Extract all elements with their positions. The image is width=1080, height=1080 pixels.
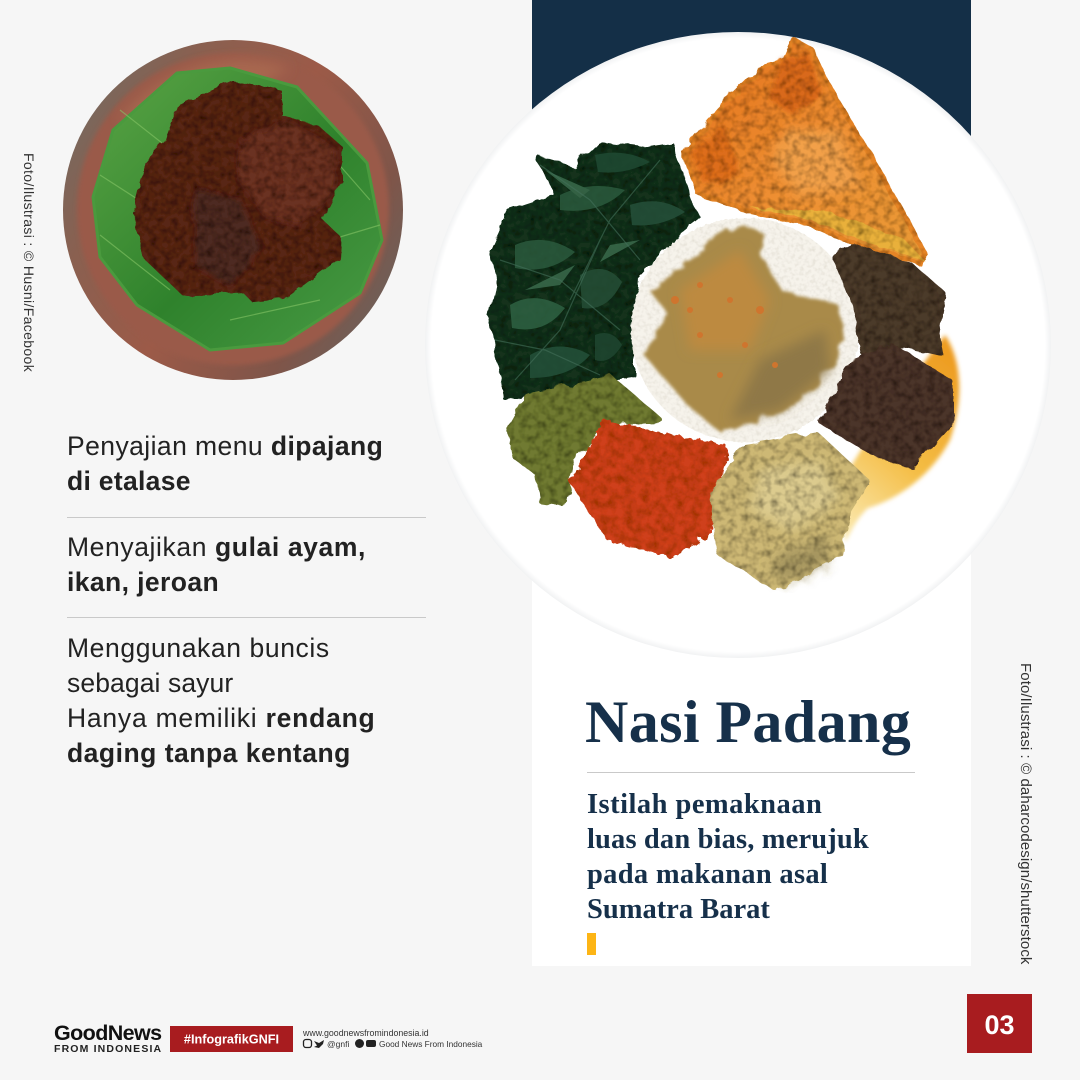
icon: dark rendang bottom bbox=[822, 347, 950, 466]
text block: rendang point three: Hanya memiliki bbox=[67, 703, 266, 733]
page number: 03 bbox=[984, 1010, 1015, 1040]
text block: rendang point one: dipajang bbox=[271, 431, 383, 461]
photo: rendang bowl bbox=[63, 40, 403, 380]
icon: instagram bbox=[304, 1040, 312, 1048]
text block: nasi padang description: pada makanan asal bbox=[587, 859, 828, 890]
text block: nasi padang description: Sumatra Barat bbox=[587, 894, 770, 925]
icon: yellow curry sauce bbox=[842, 335, 959, 542]
social links: www.goodnewsfromindonesia.id bbox=[302, 1028, 429, 1038]
text block: rendang point three: sebagai sayur bbox=[67, 668, 233, 698]
icon: facebook bbox=[355, 1039, 364, 1048]
banana leaf bbox=[93, 68, 382, 350]
hashtag badge bbox=[170, 1026, 293, 1052]
icon: rice mound bbox=[631, 218, 859, 442]
icon: dark rendang top bbox=[836, 247, 942, 353]
title: Nasi Padang bbox=[585, 689, 911, 755]
icon: twitter bbox=[314, 1040, 324, 1048]
panel: white title card bbox=[532, 240, 971, 966]
plate bbox=[425, 32, 1051, 658]
accent bar bbox=[587, 933, 596, 955]
social links: @gnfi bbox=[327, 1039, 349, 1049]
text block: rendang point two: Menyajikan bbox=[67, 532, 215, 562]
social links bbox=[302, 1028, 483, 1049]
rendang meat bbox=[135, 83, 340, 300]
text block: rendang point one: Penyajian menu bbox=[67, 431, 271, 461]
text block: rendang point two: gulai ayam, bbox=[215, 532, 366, 562]
panel: navy header block bbox=[532, 0, 971, 240]
photo: nasi padang plate bbox=[425, 32, 1051, 658]
icon: gulai offal bbox=[713, 436, 866, 586]
icon: omelette wedge bbox=[684, 40, 925, 262]
logo: GoodNews: FROM INDONESIA bbox=[54, 1043, 162, 1055]
icon: red chili sambal bbox=[573, 424, 725, 554]
icon: youtube bbox=[366, 1040, 376, 1047]
page number bbox=[967, 994, 1032, 1053]
text block: rendang point two: ikan, jeroan bbox=[67, 567, 219, 597]
text block: rendang point three: rendang bbox=[266, 703, 376, 733]
social links: Good News From Indonesia bbox=[379, 1039, 483, 1049]
text block: rendang point one: di etalase bbox=[67, 466, 191, 496]
clay bowl bbox=[63, 40, 403, 380]
icon: cassava leaves bbox=[490, 145, 697, 398]
credit: rendang photo: Foto/Ilustrasi : © Husni/Facebook bbox=[21, 153, 37, 373]
text block: rendang point three: Menggunakan buncis bbox=[67, 633, 330, 663]
icon: curry over rice bbox=[642, 225, 846, 434]
hashtag badge: #InfografikGNFI bbox=[184, 1032, 279, 1046]
text block: nasi padang description: luas dan bias, merujuk bbox=[587, 824, 869, 855]
text block: rendang point three: daging tanpa kentang bbox=[67, 738, 351, 768]
icon: green chili sambal bbox=[510, 378, 660, 505]
text block: nasi padang description: Istilah pemaknaan bbox=[587, 789, 822, 820]
credit: plate photo: Foto/Ilustrasi : © daharcodesign/shutterstock bbox=[1017, 663, 1034, 965]
logo: GoodNews: GoodNews bbox=[54, 1021, 162, 1045]
